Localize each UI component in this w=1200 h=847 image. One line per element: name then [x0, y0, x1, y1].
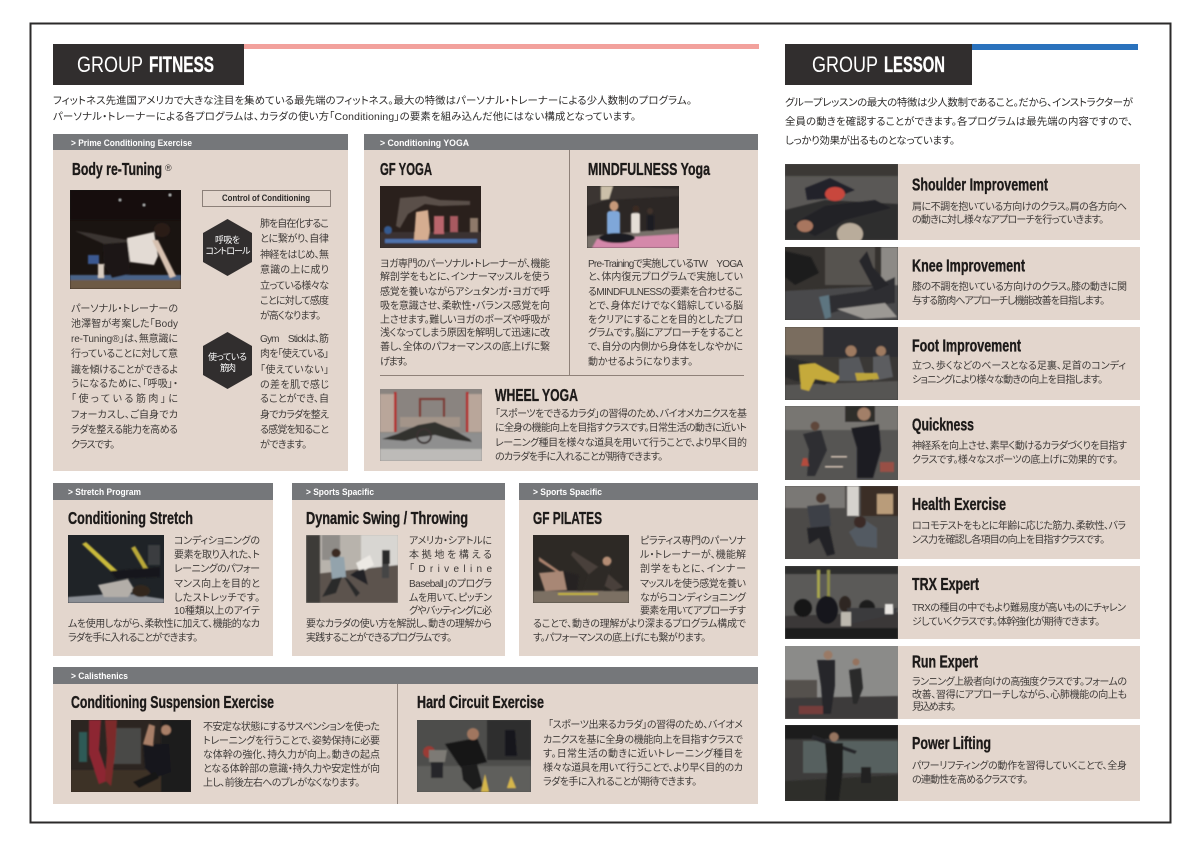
text block: description: ンス力を確認し各項目の向上を目指すクラスです。 — [912, 533, 1105, 546]
panel label: > Sports Spacific — [306, 487, 374, 498]
text block: description: ロコモテストをもとに年齢に応じた筋力、柔軟性、バラ — [912, 519, 1126, 532]
text block: GF PILATES description: ることで、動きの理解がより深まるプログラム構成で — [533, 617, 746, 630]
text block: description: 神経系を向上させ、素早く動けるカラダづくりを目指す — [912, 439, 1127, 452]
text block: Conditioning Stretch description: 要素を取り入れた、ト — [174, 548, 260, 561]
heading: Body re-Tuning: Body re-Tuning — [72, 159, 162, 179]
heading: Quickness: Quickness — [912, 414, 974, 434]
text block: description — [912, 601, 1127, 628]
title: GROUP LESSON: GROUP — [812, 52, 878, 77]
text block: Dynamic Swing description: ムを用いて、ピッチン — [409, 592, 493, 604]
icon: hexagon muscles: 筋肉 — [220, 362, 236, 373]
card: TRX Expert — [785, 566, 1140, 639]
heading: Health Exercise: Health Exercise — [912, 494, 1006, 514]
text block: GF YOGA description: 吸を意識させ、柔軟性・バランス感覚を向 — [380, 299, 550, 312]
text block: Body re-Tuning description: うになるために、「呼吸」・ — [71, 378, 178, 390]
text block: breathing: とに繋がり、自律 — [260, 232, 329, 245]
text block: lesson intro: しっかり効果が出るものとなっています。 — [785, 134, 955, 147]
text block: fitness intro: フィットネス先進国アメリカで大きな注目を集めている最先端のフィットネス。最大の特徴はパーソナル・トレーナーによる少人数制のプログラム。 — [53, 94, 692, 107]
icon: hexagon muscles: 使っている — [208, 351, 247, 362]
text block: Body re-Tuning description: 池澤智が考案した「Body — [71, 317, 178, 330]
heading: Body re-Tuning: ® — [165, 163, 172, 173]
text block: Dynamic Swing description: 要なカラダの使い方を解説し、動きの理解から — [306, 617, 492, 630]
text block: Conditioning Suspension description: な体幹の強化、持久力が向上。動きの起点 — [203, 748, 380, 761]
text block: Body re-Tuning description: クラスです。 — [71, 439, 115, 451]
text block: WHEEL YOGA description: レーニング種目を様々な道具を用いて行うことで、より早く目的 — [495, 436, 747, 449]
title: GROUP FITNESS: FITNESS — [149, 52, 214, 77]
title: GROUP FITNESS — [53, 44, 759, 85]
text block: GF YOGA description: 解剖学をもとに、インナーマッスルを使う — [380, 270, 550, 283]
text block: Dynamic Swing description: Baseball」のプログラ — [409, 577, 492, 590]
text block: Hard Circuit description: カニクスを基に全身の機能向上を目指すクラスで — [543, 733, 743, 746]
photo: Hard Circuit Exercise — [417, 720, 531, 792]
card: Quickness — [785, 406, 1140, 480]
text block: Dynamic Swing description: グやバッティングに必 — [409, 604, 492, 617]
heading: Dynamic Swing / Throwing: Dynamic Swing / Throwing — [306, 508, 468, 528]
text block: description: 膝の不調を抱いている方向けのクラス。膝の動きに関 — [912, 280, 1127, 293]
text block: Hard Circuit description: ラダを手に入れることが期待できます。 — [543, 775, 697, 788]
text block: Body re-Tuning description: パーソナル・トレーナーの — [71, 303, 178, 315]
heading: Hard Circuit Exercise: Hard Circuit Exercise — [417, 692, 544, 712]
text block: description: TRXの種目の中でもより難易度が高いものにチャレン — [912, 601, 1127, 614]
text block: muscles: の差を肌で感じ — [260, 378, 329, 391]
card: Foot Improvement — [785, 327, 1140, 400]
text block: Conditioning Stretch description: レーニングのパフォー — [174, 562, 260, 575]
text block: description — [912, 280, 1127, 307]
heading: GF PILATES: GF PILATES — [533, 508, 602, 528]
text block: GF YOGA description: げます。 — [380, 356, 408, 368]
heading: Knee Improvement: Knee Improvement — [912, 256, 1025, 276]
photo: Run Expert — [785, 646, 898, 719]
text block: description — [912, 439, 1127, 466]
text block: muscles: Gym Stickは、筋 — [260, 332, 329, 345]
title: GROUP LESSON — [785, 44, 1138, 85]
text block: breathing: が高くなります。 — [260, 309, 321, 322]
text block: Hard Circuit description: 「スポーツ出来るカラダ」の習得のため、バイオメ — [548, 718, 743, 731]
photo: Dynamic Swing — [306, 535, 398, 603]
panel label: > Sports Spacific — [533, 487, 602, 498]
text block: GF YOGA description: 浅くなってしまう原因を解明して迅速に改 — [380, 326, 550, 339]
text block: GF YOGA description — [380, 257, 550, 368]
text block: description: の連動性を高めるクラスです。 — [912, 773, 1028, 786]
text block: GF YOGA description: 感覚を養いながらアシュタンガ・ヨガで呼 — [380, 285, 550, 298]
text block: Body re-Tuning description: 識を傾けることができるよ — [71, 363, 178, 376]
card: Health Exercise — [785, 486, 1140, 559]
panel: Calisthenics — [53, 667, 758, 804]
text block: Conditioning Stretch description: コンディショニングの — [174, 534, 260, 547]
text block: Hard Circuit description: す。日常生活の動きに近いトレーニング種目を — [542, 747, 743, 760]
text block: Body re-Tuning description — [71, 303, 178, 451]
photo: Shoulder Improvement — [785, 164, 898, 240]
photo: Body re-Tuning — [70, 190, 181, 289]
text block: Body re-Tuning description: 「使っている筋肉」に — [71, 392, 178, 405]
text block: GF PILATES description — [532, 535, 747, 644]
panel: Conditioning YOGA — [364, 134, 758, 471]
text block: GF PILATES description: 要素を用いてアプローチす — [640, 604, 746, 617]
text block: Conditioning Suspension description: トレーニングを行うことで、姿勢保持に必要 — [203, 734, 380, 747]
text block: fitness intro: パーソナル・トレーナーによる各プログラムは、カラダの使い方「Conditioning」の要素を組み込んだ他にはない構成となっています。 — [53, 110, 636, 123]
text block: Dynamic Swing description: 本拠地を構える — [409, 548, 492, 561]
photo: Conditioning Suspension Exercise — [71, 720, 191, 792]
heading: TRX Expert: TRX Expert — [912, 574, 979, 594]
text block: GF YOGA description: 上させます。難しいヨガのポーズや呼吸が — [380, 313, 550, 326]
text block: MINDFULNESS Yoga description: で、自分の内側から身体をしなやかに — [588, 340, 743, 353]
text block: lesson intro: グループレッスンの最大の特徴は少人数制であること。だから、インストラクターが — [785, 96, 1134, 109]
text block: Conditioning Suspension description — [203, 720, 380, 789]
heading: MINDFULNESS Yoga: MINDFULNESS Yoga — [588, 159, 710, 179]
icon: hexagon muscles — [203, 332, 252, 389]
panel: Stretch Program — [53, 483, 273, 656]
photo: GF YOGA — [380, 186, 481, 248]
text block: description: 立つ、歩くなどのベースとなる足裏、足首のコンディ — [912, 359, 1126, 372]
text block: Conditioning Stretch description: ムを使用しながら、柔軟性に加えて、機能的なカ — [68, 617, 260, 630]
card: Knee Improvement — [785, 247, 1140, 320]
text block: Body re-Tuning description: 行っていることに対して意 — [71, 347, 178, 360]
heading: WHEEL YOGA: WHEEL YOGA — [495, 385, 578, 405]
heading: GF YOGA: GF YOGA — [380, 159, 432, 179]
text block: WHEEL YOGA description: 「スポーツをできるカラダ」の習得のため、バイオメカニクスを基 — [495, 407, 747, 420]
text block: GF PILATES description: ながらコンディショニング — [640, 591, 747, 604]
text block: breathing: 意識の上に成り — [260, 264, 329, 276]
text block: description: 与する筋肉へアプローチし機能改善を目指します。 — [912, 294, 1105, 307]
text block: Conditioning Suspension description: となる体幹部の意識・持久力や安定性が向 — [203, 762, 380, 775]
text block: GF PILATES description: ピラティス専門のパーソナ — [640, 535, 746, 547]
text block: breathing: 神経をはじめ、無 — [260, 248, 329, 261]
text block: MINDFULNESS Yoga description: 動かせるようになります。 — [588, 355, 693, 368]
text block: Body re-Tuning description: フォーカスし、ご自身でカ — [71, 408, 178, 421]
heading: Conditioning Stretch: Conditioning Stretch — [68, 508, 193, 528]
panel: Sports Spacific (GF PILATES) — [519, 483, 758, 656]
text block: Conditioning Stretch description: 10種類以上のアイテ — [174, 604, 260, 617]
text block: MINDFULNESS Yoga description: とで、身体だけでなく錯綜している脳 — [588, 299, 743, 312]
icon: hexagon breathing: コントロール — [206, 246, 251, 256]
card: Run Expert — [785, 646, 1140, 719]
photo: Health Exercise — [785, 486, 898, 559]
text block: description: ジしていくクラスです。体幹強化が期待できます。 — [912, 615, 1100, 628]
text block: Conditioning Suspension description: 上し、前後左右へのブレがなくなります。 — [203, 776, 360, 789]
text block: Conditioning Stretch description: したストレッチです。 — [174, 592, 260, 604]
text block: muscles: 「使えていない」 — [260, 363, 329, 376]
text block: description — [912, 359, 1126, 386]
text block: description — [912, 675, 1127, 713]
text block: lesson intro: 全員の動きを確認することができます。各プログラムは最先端の内容ですので、 — [785, 115, 1133, 128]
text block: GF YOGA description: 善し、全体のパフォーマンスの底上げに繋 — [380, 340, 550, 353]
text block: muscles: る感覚を知ること — [260, 423, 329, 436]
title: GROUP LESSON: LESSON — [884, 52, 945, 77]
photo: Quickness — [785, 406, 898, 480]
icon: hexagon breathing: 呼吸を — [215, 235, 240, 245]
text block: MINDFULNESS Yoga description: グラムです。脳にアプローチをすること — [588, 326, 743, 339]
text block: Dynamic Swing description: 「Driveline — [409, 563, 492, 575]
text block: muscles: 肉を「使えている」 — [260, 347, 329, 360]
heading: Shoulder Improvement: Shoulder Improvement — [912, 174, 1048, 194]
title: GROUP FITNESS: GROUP — [77, 52, 143, 77]
panel label: > Prime Conditioning Exercise — [71, 138, 192, 149]
panel: Sports Spacific (Dynamic Swing) — [292, 483, 505, 656]
text block: breathing — [260, 217, 329, 322]
text block: description: 見込めます。 — [912, 701, 956, 713]
text block: muscles — [260, 332, 330, 451]
callout: Control of Conditioning — [202, 190, 330, 206]
panel: Prime Conditioning Exercise — [53, 134, 348, 471]
photo: MINDFULNESS Yoga — [587, 186, 679, 248]
text block: GF PILATES description: ル・トレーナーが、機能解 — [640, 548, 746, 561]
text block: description: クラスです。様々なスポーツの底上げに効果的です。 — [912, 453, 1118, 466]
text block: description — [912, 759, 1127, 786]
heading: Conditioning Suspension Exercise: Conditioning Suspension Exercise — [71, 692, 274, 712]
card: Power Lifting — [785, 725, 1140, 801]
text block: GF PILATES description: 剖学をもとに、インナー — [640, 562, 746, 575]
text block: fitness intro — [53, 94, 692, 123]
text block: Body re-Tuning description: re-Tuning®」は、無意識に — [71, 332, 178, 345]
panel label: > Calisthenics — [71, 671, 128, 682]
photo: Conditioning Stretch — [68, 535, 164, 603]
text block: Conditioning Stretch description — [68, 534, 260, 644]
text block: WHEEL YOGA description: に全身の機能向上を目指すクラスです。日常生活の動きに近いト — [495, 421, 747, 434]
text block: muscles: ることができ、自 — [260, 392, 329, 405]
text block: WHEEL YOGA description — [495, 407, 747, 463]
text block: MINDFULNESS Yoga description — [588, 257, 743, 368]
text block: description: 改善、習得にアプローチしながら、心肺機能の向上も — [912, 688, 1127, 701]
text block: MINDFULNESS Yoga description: と、体内復元プログラムで実施してい — [588, 270, 743, 283]
photo: TRX Expert — [785, 566, 898, 639]
photo: Power Lifting — [785, 725, 898, 801]
text block: description: ランニング上級者向けの高強度クラスです。フォームの — [912, 675, 1127, 688]
icon: hexagon breathing — [203, 219, 252, 276]
photo: WHEEL YOGA — [380, 389, 482, 461]
text block: description — [912, 200, 1127, 226]
photo: Foot Improvement — [785, 327, 898, 400]
text block: description: 肩に不調を抱いている方向けのクラス。肩の各方向へ — [912, 200, 1127, 213]
card: Shoulder Improvement — [785, 164, 1140, 245]
text block: Dynamic Swing description: 実践することができるプログラムです。 — [306, 631, 452, 644]
text block: MINDFULNESS Yoga description: Pre-Trainingで実施しているTW YOGA — [588, 257, 743, 270]
text block: Hard Circuit description: 様々な道具を用いて行うことで、より早く目的のカ — [543, 761, 743, 774]
text block: GF PILATES description: す。パフォーマンスの底上げにも繋がります。 — [532, 631, 706, 644]
heading: Power Lifting: Power Lifting — [912, 733, 991, 753]
text block: GF PILATES description: マッスルを使う感覚を養い — [640, 577, 746, 590]
text block: breathing: ことに対して感度 — [260, 294, 329, 307]
text block: description: の動きに対し様々なアプローチを行っていきます。 — [912, 213, 1104, 226]
photo: Knee Improvement — [785, 247, 898, 320]
text block: muscles: ができます。 — [260, 438, 307, 451]
text block: Conditioning Stretch description: ラダを手に入れることができます。 — [68, 631, 198, 644]
text block: lesson intro — [785, 96, 1134, 147]
text block: muscles: 身でカラダを整え — [260, 408, 330, 421]
text block: MINDFULNESS Yoga description: るMINDFULNESSの要素を合わせるこ — [588, 285, 743, 298]
text block: Body re-Tuning description: ラダを整える能力を高める — [71, 423, 178, 436]
text block: breathing: 立っている様々な — [260, 279, 329, 292]
text block: MINDFULNESS Yoga description: をクリアにすることを目的としたプロ — [588, 313, 743, 326]
heading: Foot Improvement: Foot Improvement — [912, 336, 1021, 356]
text block: Dynamic Swing description — [306, 535, 493, 644]
text block: description: パワーリフティングの動作を習得していくことで、全身 — [912, 759, 1127, 772]
photo: GF PILATES — [533, 535, 629, 603]
heading: Run Expert: Run Expert — [912, 652, 978, 672]
text block: description: ショニングにより様々な動きの向上を目指します。 — [912, 373, 1103, 386]
text block: breathing: 肺を自在化するこ — [260, 217, 329, 230]
panel label: > Conditioning YOGA — [380, 138, 469, 149]
text block: Dynamic Swing description: アメリカ・シアトルに — [409, 535, 492, 547]
text block: description — [912, 519, 1126, 546]
text block: Conditioning Stretch description: マンス向上を目的と — [174, 577, 260, 590]
text block: GF YOGA description: ヨガ専門のパーソナル・トレーナーが、機能 — [380, 257, 550, 270]
text block: Hard Circuit description — [542, 718, 743, 788]
panel label: > Stretch Program — [68, 487, 141, 498]
callout: Control of Conditioning: Control of Conditioning — [222, 193, 310, 204]
text block: Conditioning Suspension description: 不安定な状態にするサスペンションを使った — [203, 720, 380, 733]
text block: WHEEL YOGA description: のカラダを手に入れることが期待できます。 — [495, 450, 663, 463]
